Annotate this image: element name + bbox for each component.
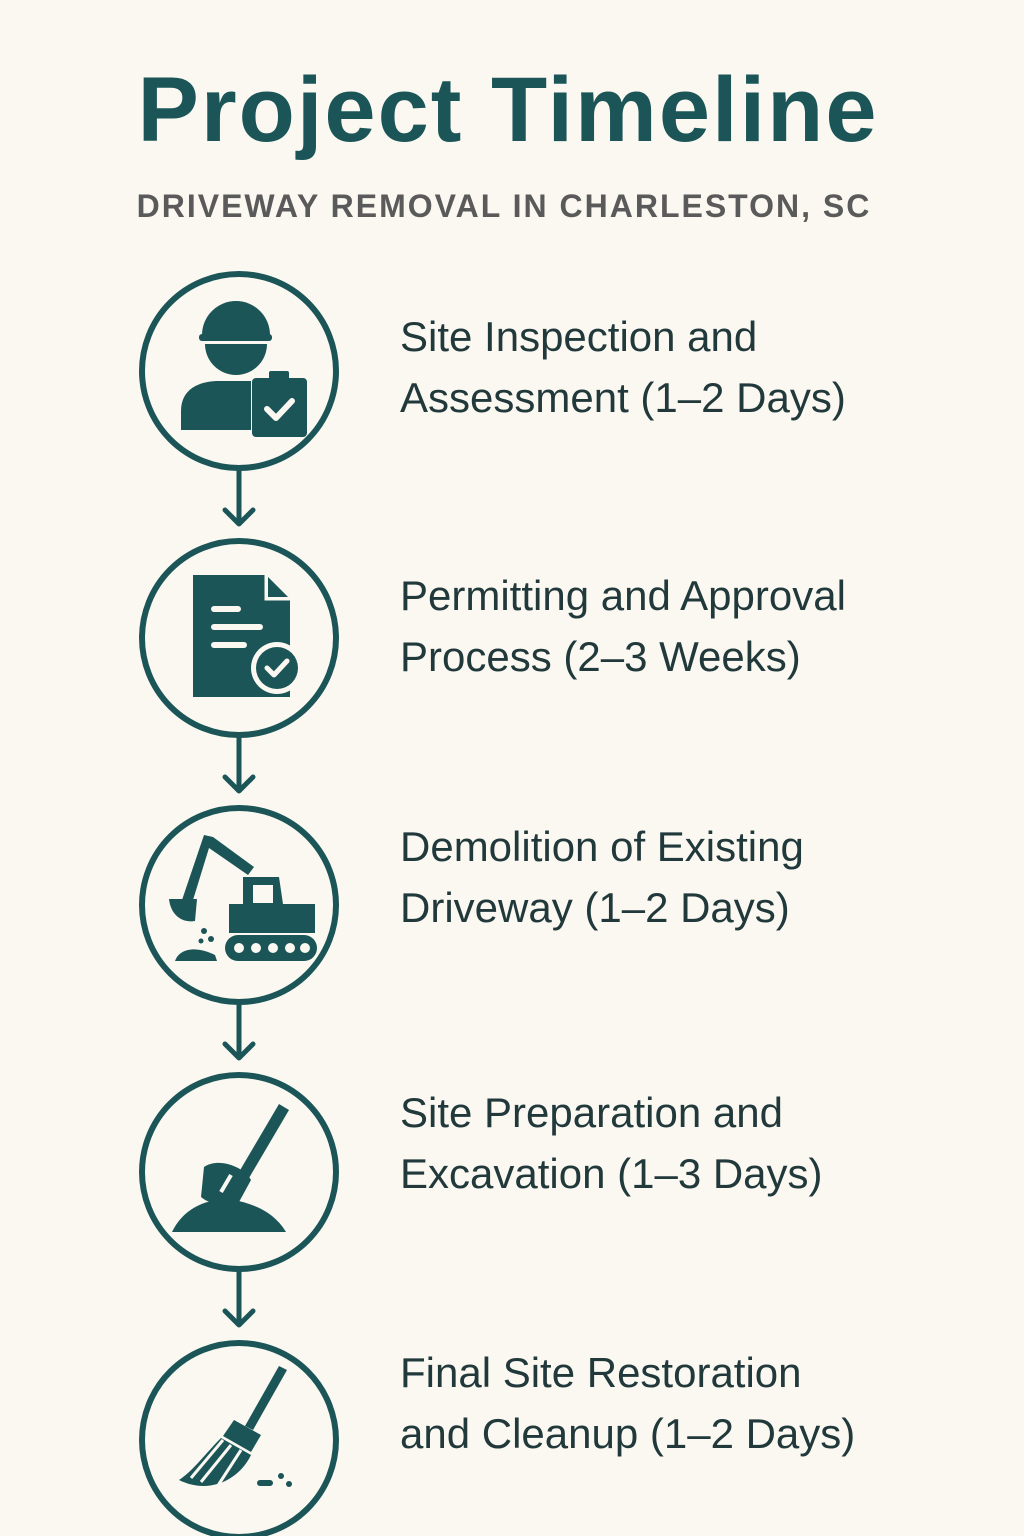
step 3 text: Driveway (1–2 Days) [400,884,790,931]
subtitle: DRIVEWAY REMOVAL IN CHARLESTON, SC [137,188,871,224]
step 5 text: Final Site Restoration [400,1349,802,1396]
step 2 text: Process (2–3 Weeks) [400,633,801,680]
step 2 text [400,572,846,680]
step 3 text [400,823,804,931]
icon: shovel [172,1104,289,1232]
icon: broom [179,1366,292,1487]
step 5 text [400,1349,855,1457]
step 4 text [400,1089,823,1197]
step 1 text: Assessment (1–2 Days) [400,374,846,421]
step 1 text: Site Inspection and [400,313,757,360]
step 4 text: Site Preparation and [400,1089,783,1136]
step 5 text: and Cleanup (1–2 Days) [400,1410,855,1457]
step 1 text [400,313,846,421]
step 2 text: Permitting and Approval [400,572,846,619]
step 4 text: Excavation (1–3 Days) [400,1150,823,1197]
icon: permit document [193,575,303,697]
title: Project Timeline [137,59,878,161]
step 3 text: Demolition of Existing [400,823,804,870]
arrows [225,470,253,1325]
icon: inspector [181,301,307,437]
icon: excavator [169,835,317,961]
